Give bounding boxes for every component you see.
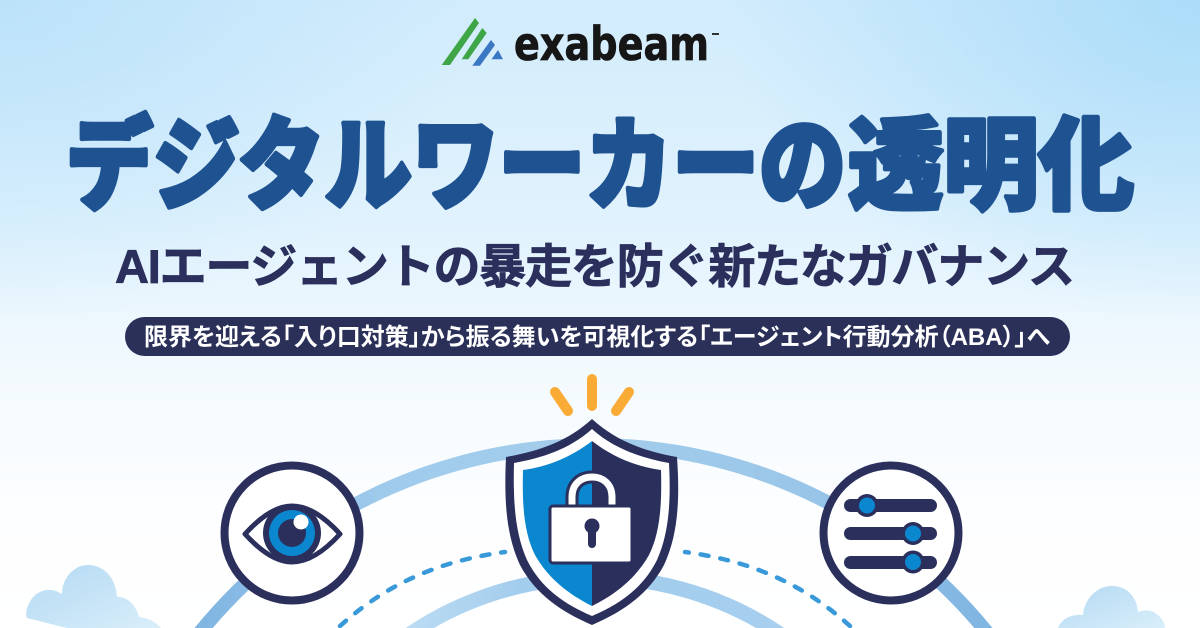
banner pill (125, 317, 1070, 356)
icon: settings sliders badge (824, 466, 958, 600)
cloud: left (26, 565, 161, 628)
arc: dashed left (340, 552, 505, 626)
banner text: 限界を迎える「入り口対策」から振る舞いを可視化する「エージェント行動分析（ABA）」へ (144, 324, 1051, 351)
logo: exabeam (442, 17, 719, 71)
trademark mark (712, 33, 719, 35)
title: 透明化 (848, 111, 1134, 223)
arc: dashed right (685, 552, 850, 626)
wordmark: exabeam (514, 17, 709, 71)
subtitle: AIエージェントの暴走を防ぐ新たなガバナンス (115, 240, 1075, 293)
arc: inner (406, 570, 784, 628)
icon: padlock (550, 477, 632, 563)
slider 2 (844, 522, 937, 545)
slider 3 (844, 550, 937, 574)
slider 1 (844, 494, 937, 517)
cloud: right (1058, 586, 1165, 628)
icon: shield with padlock (505, 419, 678, 625)
icon: eye badge (224, 466, 360, 600)
icon: alert rays (555, 379, 629, 411)
arc: outer (194, 438, 992, 628)
title: デジタルワーカーの (66, 111, 846, 223)
icon: exabeam stripes (442, 18, 503, 66)
icon: eye (245, 504, 340, 562)
